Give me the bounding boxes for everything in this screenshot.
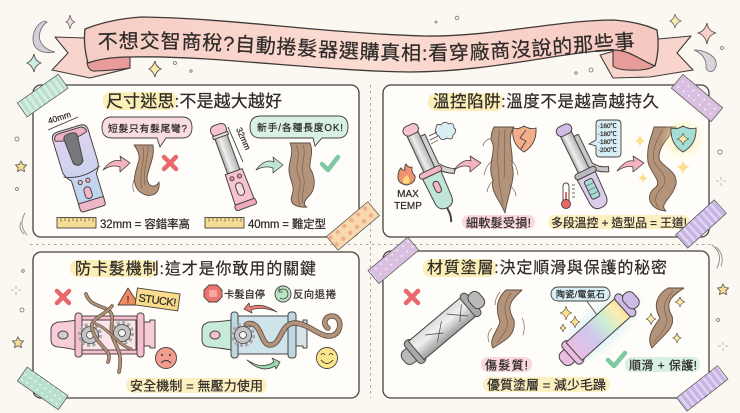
callout: temperature list: ·160℃ bbox=[598, 123, 617, 130]
icon: green check bbox=[608, 353, 625, 366]
icon: stop sign bbox=[204, 285, 222, 302]
icon: ruler 2 bbox=[205, 218, 244, 228]
hair: damaged bbox=[483, 127, 518, 213]
caption: 優質塗層 = 減少毛躁 bbox=[487, 378, 606, 392]
arrow: green bbox=[247, 358, 280, 369]
label: stuck bbox=[135, 288, 180, 311]
tape: green bottom-left bbox=[17, 367, 68, 410]
speech bubble: beginners bbox=[250, 116, 348, 146]
label: best practice: 多段溫控 + 造型品 = 王道! bbox=[551, 215, 687, 230]
label: 40mm: 40mm bbox=[47, 109, 72, 126]
decoration: sparkle yellow right bbox=[670, 14, 681, 28]
icon: gear right bbox=[112, 323, 132, 343]
icon: gear left bbox=[80, 325, 100, 345]
icon: 40mm auto curler bbox=[51, 123, 111, 214]
heading: 尺寸迷思:不是越大越好 bbox=[106, 92, 282, 111]
label: 32mm bbox=[228, 126, 253, 162]
hair: tangled bbox=[86, 294, 131, 372]
icon: sparkles right bbox=[646, 297, 685, 343]
decoration: small dots bbox=[15, 16, 724, 321]
callout: temperature list bbox=[589, 120, 621, 157]
heading highlight bbox=[70, 260, 158, 277]
hair: 40mm soft wave bbox=[289, 143, 314, 207]
icon: gear bbox=[233, 325, 253, 345]
decoration: star right bbox=[718, 284, 728, 294]
heading highlight bbox=[103, 92, 177, 110]
decoration: moon right bbox=[694, 50, 716, 72]
ribbon main band bbox=[84, 17, 658, 72]
icon: warning triangle bbox=[118, 288, 139, 306]
text: auto stop: 卡髮自停 bbox=[224, 288, 265, 301]
tape: pink top-right bbox=[671, 74, 723, 122]
label: damages hair: 傷髮質! bbox=[485, 358, 528, 372]
decoration: stars left bbox=[12, 161, 26, 348]
arrow: pink bbox=[454, 156, 481, 172]
hair: healthy wave bbox=[648, 127, 676, 211]
decoration: sparkle yellow below ribbon bbox=[149, 61, 161, 77]
panel: size myth bbox=[33, 85, 359, 237]
panel: coating bbox=[383, 251, 709, 398]
title ribbon bbox=[51, 16, 694, 78]
label: damage: 細軟髮受損! bbox=[466, 215, 531, 230]
icon: multi-temp iron bbox=[552, 115, 623, 212]
icon: broken shield bbox=[513, 126, 536, 152]
text: max temp: MAX bbox=[397, 189, 419, 200]
icon: ruler 1 bbox=[57, 218, 96, 228]
decoration: moon left bbox=[33, 21, 55, 53]
panel: anti-tangle bbox=[33, 252, 359, 398]
hair: ends-only curl bbox=[133, 145, 159, 195]
icon: thermometer bbox=[562, 183, 575, 208]
icon: steam bbox=[429, 122, 456, 144]
callout: ceramic tourmaline bbox=[551, 287, 610, 315]
callout: temperature list: ·180℃ bbox=[598, 139, 617, 146]
decoration: sparkle top left bbox=[66, 15, 75, 29]
heading: 防卡髮機制:這才是你敢用的關鍵 bbox=[75, 259, 316, 278]
device: safe curler bbox=[202, 312, 307, 358]
heading highlight bbox=[428, 93, 503, 111]
hair: smooth pass bbox=[247, 316, 340, 345]
hair: damaged curl bbox=[488, 290, 524, 348]
title text: 不想交智商稅?自動捲髮器選購真相:看穿廠商沒說的那些事 bbox=[98, 30, 634, 62]
icon: max temp iron bbox=[398, 115, 475, 226]
arrow: green bbox=[256, 157, 283, 173]
icon: red cross bbox=[164, 157, 176, 169]
device: jammed curler bbox=[51, 313, 155, 357]
icon: green check bbox=[322, 157, 338, 170]
icon: glowing shield bbox=[661, 117, 705, 161]
heading highlight bbox=[423, 259, 496, 277]
icon: red cross bbox=[406, 291, 418, 303]
text: 40mm: 40mm = 難定型 bbox=[248, 217, 326, 231]
arrow: red reverse bbox=[244, 303, 277, 313]
arrow: pink bbox=[103, 156, 130, 172]
icon: sparkles left bbox=[560, 306, 580, 332]
text: reverse: 反向退捲 bbox=[293, 288, 336, 301]
heading: 材質塗層:決定順滑與保護的秘密 bbox=[427, 259, 667, 277]
ribbon left fold bbox=[87, 57, 130, 71]
icon: damaged barrel bbox=[395, 285, 490, 372]
hair: smooth curl bbox=[650, 288, 684, 348]
text: 32mm: 32mm = 容錯率高 bbox=[100, 217, 190, 231]
callout: temperature list: ·180℃ bbox=[598, 131, 617, 138]
arrow: pink bbox=[617, 156, 644, 172]
icon: sparkles bbox=[635, 134, 690, 183]
icon: red cross bbox=[57, 291, 69, 303]
tape: purple right bbox=[676, 200, 726, 248]
callout: temperature list: ·200℃ bbox=[598, 147, 617, 154]
callout: ceramic tourmaline: 陶瓷/電氣石 bbox=[556, 288, 605, 300]
icon: 32mm curling wand bbox=[206, 121, 257, 211]
icon: warning triangle: ! bbox=[127, 295, 129, 306]
decoration: arcs bbox=[20, 213, 722, 268]
tape: orange bbox=[327, 202, 379, 250]
icon: flame bbox=[398, 164, 415, 185]
ribbon right tail bbox=[600, 36, 693, 78]
icon: ceramic barrel bbox=[542, 273, 658, 383]
icon: happy face bbox=[316, 348, 338, 368]
tape: purple center bbox=[368, 237, 419, 284]
decoration: sparkle pink right bbox=[698, 23, 716, 44]
text: temp label: TEMP bbox=[394, 201, 422, 212]
label: stuck: STUCK! bbox=[138, 292, 177, 310]
label: smooth protect: 順滑 + 保護! bbox=[629, 358, 697, 372]
tape: green top-left bbox=[17, 74, 68, 117]
panel: temperature trap bbox=[383, 85, 709, 237]
decoration: faint sparkles bbox=[11, 177, 728, 351]
heading: 溫控陷阱:溫度不是越高越持久 bbox=[433, 92, 659, 111]
speech bubble: short hair bbox=[102, 117, 192, 147]
tape: purple bottom-right bbox=[677, 366, 728, 411]
label: 32mm: 32mm bbox=[234, 126, 253, 151]
caption: 安全機制 = 無壓力使用 bbox=[130, 378, 263, 394]
speech bubble: short hair: 短髮只有髮尾彎? bbox=[108, 122, 188, 135]
icon: sad face bbox=[156, 348, 176, 368]
ribbon left tail bbox=[52, 37, 130, 78]
speech bubble: beginners: 新手/各種長度OK! bbox=[257, 121, 343, 134]
icon: reverse bbox=[275, 286, 291, 302]
label: 40mm bbox=[47, 109, 78, 130]
ribbon right fold bbox=[613, 50, 655, 70]
decoration: sparkle mint left bbox=[27, 54, 41, 72]
